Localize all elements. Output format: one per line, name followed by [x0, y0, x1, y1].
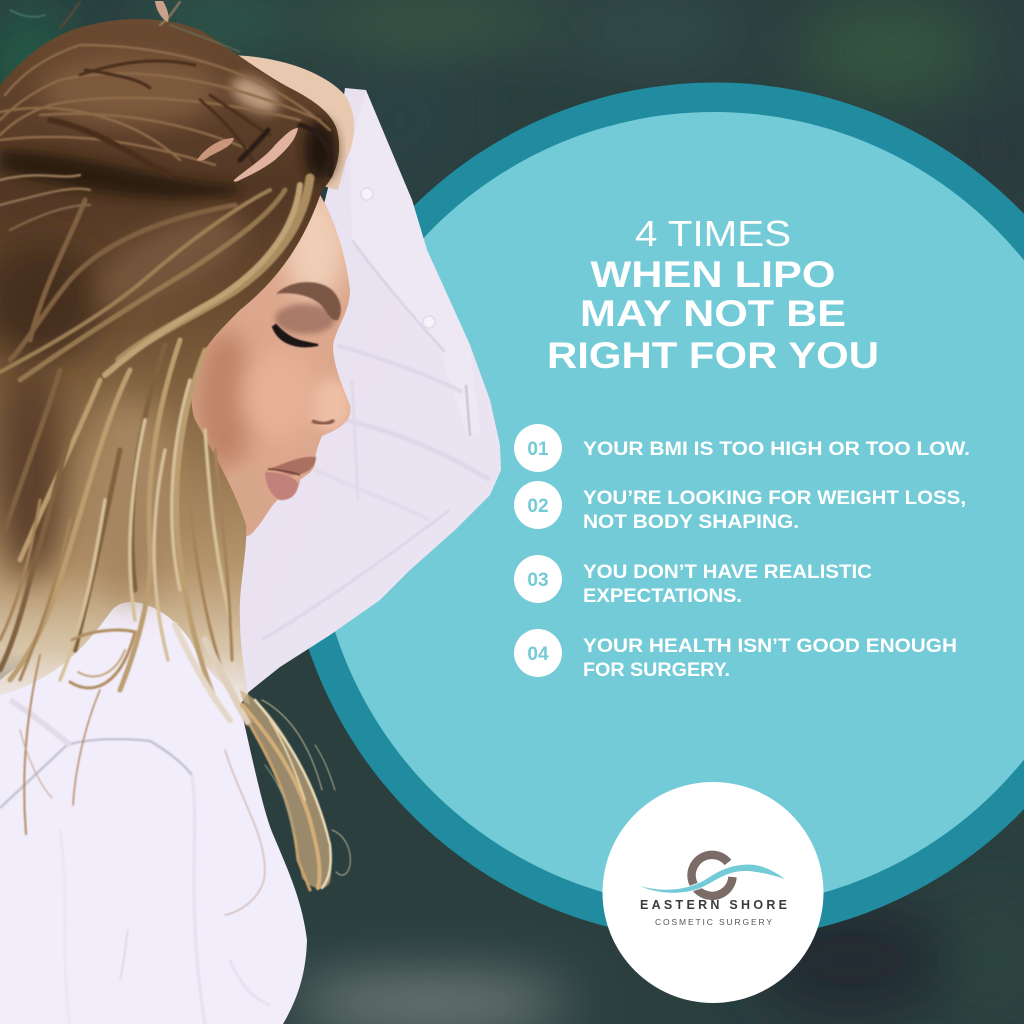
title: WHEN LIPO — [590, 254, 836, 295]
woman photo illustration — [0, 1, 501, 1024]
title: 4 TIMES — [635, 213, 791, 254]
hair mass — [0, 19, 339, 705]
list item 03: EXPECTATIONS. — [583, 585, 742, 607]
lower hair clump — [240, 690, 350, 890]
list item 02: NOT BODY SHAPING. — [583, 511, 799, 533]
hand in hair — [225, 55, 354, 190]
sleeve folds — [262, 240, 490, 640]
list item 02: 02 — [527, 496, 549, 517]
logo badge — [602, 782, 824, 1003]
list item 01 — [514, 424, 970, 472]
raised sleeve — [220, 88, 501, 695]
mid hair strands — [10, 340, 215, 700]
list item 03 — [514, 555, 872, 607]
hair strands — [0, 2, 331, 915]
list item 03: 03 — [527, 570, 549, 591]
list item 04: 04 — [527, 644, 549, 665]
face shading — [195, 190, 352, 530]
eyebrow — [276, 282, 341, 320]
list item 02: YOU’RE LOOKING FOR WEIGHT LOSS, — [583, 487, 966, 509]
lips — [265, 457, 316, 500]
curl loop — [70, 630, 135, 688]
list item 01: 01 — [527, 439, 549, 460]
fingers — [234, 128, 298, 182]
shirt folds — [0, 700, 270, 1024]
thin wisps over shirt — [24, 655, 40, 834]
logo mark — [640, 855, 785, 896]
eye lashes — [273, 325, 318, 346]
shirt buttons — [361, 188, 435, 328]
list item 02 — [514, 481, 966, 533]
crown strands — [0, 45, 330, 165]
inner light blue circle — [316, 112, 1024, 908]
logo subtitle: COSMETIC SURGERY — [655, 917, 772, 927]
list item 03: YOU DON’T HAVE REALISTIC — [583, 561, 872, 583]
blond sweep band — [120, 178, 310, 360]
title: RIGHT FOR YOU — [547, 335, 879, 376]
nostril — [312, 420, 334, 424]
hair shadows and highlights — [0, 55, 336, 600]
title: MAY NOT BE — [580, 293, 846, 334]
large teal circle ring — [286, 82, 1024, 940]
list item 04: YOUR HEALTH ISN’T GOOD ENOUGH — [583, 635, 957, 657]
logo name: EASTERN SHORE — [640, 898, 787, 912]
shirt body — [0, 535, 307, 1024]
finger under hair — [197, 138, 234, 161]
list item 01: YOUR BMI IS TOO HIGH OR TOO LOW. — [583, 438, 970, 460]
white cuff panel — [350, 92, 480, 436]
face — [192, 195, 350, 536]
list item 04: FOR SURGERY. — [583, 659, 730, 681]
top flyaway wisps — [60, 2, 80, 28]
title — [547, 213, 879, 376]
finger above hair — [155, 1, 169, 22]
eye shadow — [275, 304, 335, 334]
list item 04 — [514, 629, 957, 681]
